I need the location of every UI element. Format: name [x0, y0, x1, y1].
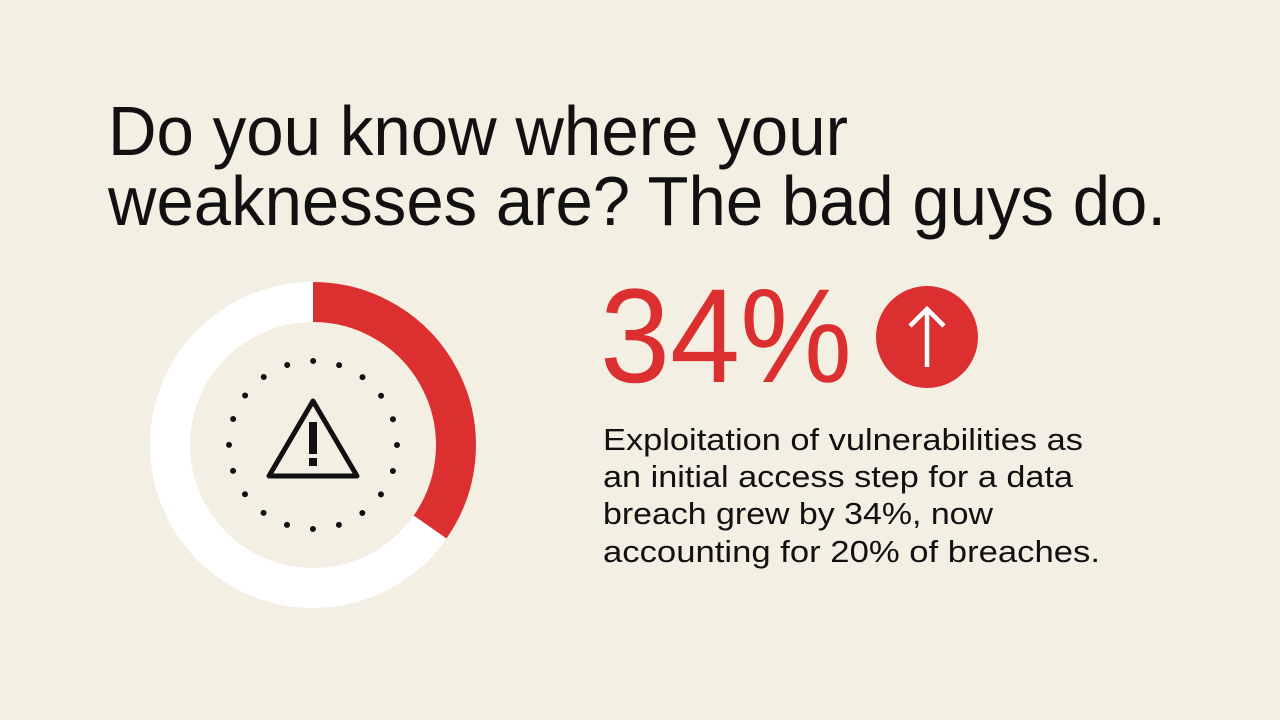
description text: an initial access step for a data — [603, 459, 1074, 494]
dotted circle — [229, 361, 397, 529]
icon: up arrow circle — [876, 286, 978, 388]
description text — [603, 422, 1100, 569]
description text: breach grew by 34%, now — [603, 496, 994, 531]
icon: warning triangle — [269, 401, 357, 476]
red arc 34% — [313, 302, 456, 527]
description text: Exploitation of vulnerabilities as — [603, 422, 1083, 457]
big stat 34%: 34% — [600, 262, 852, 411]
description text: accounting for 20% of breaches. — [603, 534, 1100, 569]
title — [107, 92, 1166, 240]
donut chart — [170, 302, 456, 588]
title: Do you know where your — [108, 92, 848, 170]
title: weaknesses are? The bad guys do. — [107, 162, 1166, 240]
